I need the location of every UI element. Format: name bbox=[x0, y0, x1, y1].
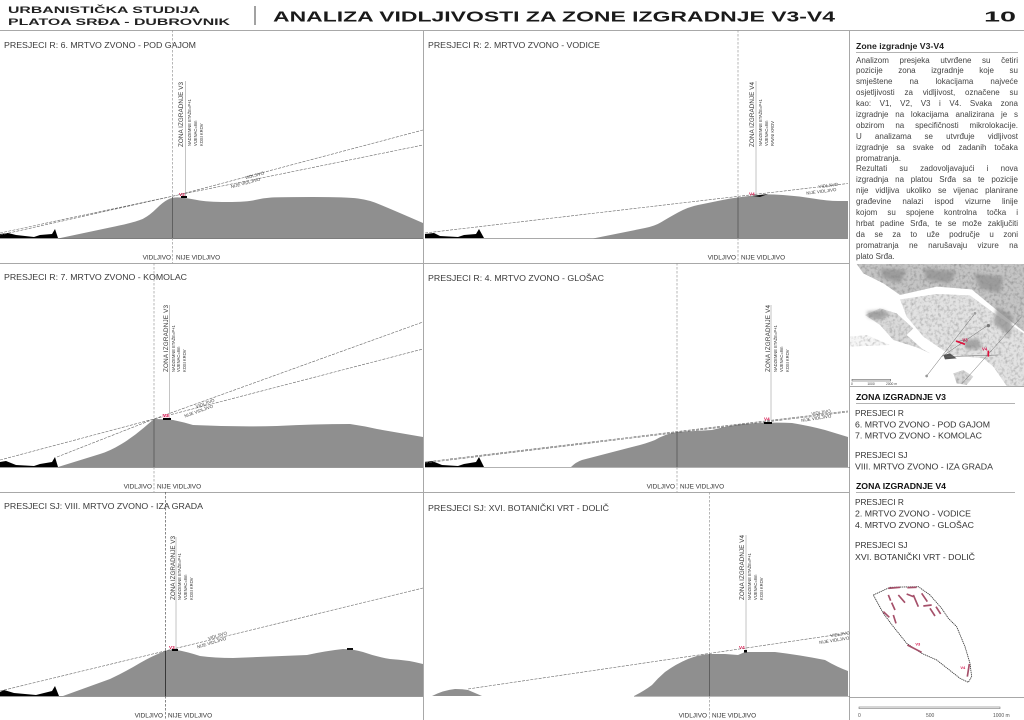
panel: section R2 Vodice: VIDLJIVO bbox=[708, 254, 736, 262]
panel: section R6 Pod Gajom: NADZEMNE ETAŽE=P+1 bbox=[187, 98, 192, 146]
panel: section R6 Pod Gajom: NIJE VIDLJIVO bbox=[230, 176, 261, 189]
panel: section SJ XVI Dolic: PRESJECI SJ: XVI. BOTANIČKI VRT - DOLIČ bbox=[428, 503, 609, 513]
zone V3 list: 6. MRTVO ZVONO - POD GAJOM bbox=[855, 420, 990, 430]
sidebar body text: izgradnja na platou Srđa sa te pozicije bbox=[856, 175, 1018, 184]
panel: section SJ VIII Iza Grada: VIDLJIVO bbox=[207, 630, 228, 641]
panel: section R2 Vodice: V4 bbox=[749, 192, 755, 196]
panel: section R4 Glosac: NADZEMNE ETAŽE=P+1 bbox=[773, 324, 778, 372]
panel: section R2 Vodice: VIJENAC=8m bbox=[764, 120, 769, 146]
panel: section R2 Vodice: ZONA IZGRADNJE V4 bbox=[749, 82, 756, 147]
panel: section R4 Glosac: VIDLJIVO bbox=[647, 484, 675, 490]
panel: section R6 Pod Gajom: VIJENAC=8m bbox=[193, 120, 198, 146]
header: study title: URBANISTIČKA STUDIJA bbox=[8, 4, 200, 16]
panel: section R6 Pod Gajom: VIDLJIVO bbox=[244, 170, 265, 180]
plateau outline map bbox=[873, 587, 972, 682]
location map: 2000 m bbox=[886, 382, 897, 386]
sidebar body text: obzirom na specifičnosti mikrolokacije. bbox=[856, 121, 1018, 130]
plateau outline map: V3 bbox=[915, 642, 921, 647]
panel: section R4 Glosac: NIJE VIDLJIVO bbox=[680, 484, 724, 490]
sidebar body text: Rezultati su zadovoljavajući i nova bbox=[856, 164, 1018, 173]
zone V4 list: XVI. BOTANIČKI VRT - DOLIČ bbox=[855, 552, 975, 562]
location map bbox=[850, 264, 1024, 386]
panel: section R4 Glosac: V4 bbox=[764, 416, 770, 422]
zone V3 list: PRESJECI R bbox=[855, 408, 904, 418]
zone V4 list bbox=[855, 482, 1015, 562]
panel: section R7 Komolac: V3 bbox=[163, 413, 169, 418]
panel: section R7 Komolac: VIDLJIVO bbox=[124, 484, 152, 490]
sidebar body text: nije vidljiva ukoliko se vijenac planirane bbox=[856, 186, 1018, 195]
panel: section R6 Pod Gajom: V3 bbox=[179, 192, 185, 197]
panel: section R4 Glosac: VIDLJIVO bbox=[811, 408, 832, 416]
panel: section R6 Pod Gajom: PRESJECI R: 6. MRTVO ZVONO - POD GAJOM bbox=[4, 41, 196, 50]
sidebar body text: plato Srđa. bbox=[856, 252, 895, 261]
header: study title: PLATOA SRĐA - DUBROVNIK bbox=[8, 17, 230, 28]
panel: section R4 Glosac: KOSI KROV bbox=[785, 349, 790, 372]
panel: section SJ VIII Iza Grada: V3 bbox=[169, 645, 175, 650]
panel: section R2 Vodice: NIJE VIDLJIVO bbox=[806, 187, 837, 196]
sidebar body text: građevine nalazi ispod vizurne linije bbox=[856, 197, 1018, 206]
panel: section SJ VIII Iza Grada: NIJE VIDLJIVO bbox=[168, 712, 212, 720]
sidebar body text: hrbat padine Srđa, te se može zaključiti bbox=[856, 219, 1018, 228]
sidebar body text: promatranja ne narušavaju vizure na bbox=[856, 241, 1018, 250]
sidebar body text: smještene na lokacijama najveće bbox=[856, 77, 1018, 86]
panel: section SJ VIII Iza Grada: VIDLJIVO bbox=[135, 712, 163, 720]
sidebar body text: pozicije zona izgradnje koje su bbox=[856, 66, 1018, 75]
page number: 10 bbox=[984, 8, 1016, 26]
sidebar body text: izgradnje sa svake od zadanih točaka bbox=[856, 143, 1018, 152]
panel: section SJ VIII Iza Grada: ZONA IZGRADNJE V3 bbox=[170, 536, 177, 600]
panel: section SJ VIII Iza Grada: NIJE VIDLJIVO bbox=[196, 636, 227, 650]
location map: 0 bbox=[851, 382, 853, 386]
panel: section SJ XVI Dolic: ZONA IZGRADNJE V4 bbox=[739, 535, 746, 600]
panel: section R6 Pod Gajom: KOSI KROV bbox=[199, 123, 204, 146]
panel: section R7 Komolac: NADZEMNE ETAŽE=P+1 bbox=[171, 324, 176, 372]
zone V3 list: VIII. MRTVO ZVONO - IZA GRADA bbox=[855, 462, 993, 472]
header: main title: ANALIZA VIDLJIVOSTI ZA ZONE IZGRADNJE V3-V4 bbox=[273, 8, 836, 26]
scale bar bbox=[858, 707, 1010, 719]
panel: section SJ VIII Iza Grada bbox=[0, 492, 423, 720]
panel: section R2 Vodice: PRESJECI R: 2. MRTVO ZVONO - VODICE bbox=[428, 41, 601, 50]
location map: V4 bbox=[982, 346, 988, 351]
location map: 1000 bbox=[867, 382, 875, 386]
panel: section SJ XVI Dolic bbox=[428, 492, 851, 720]
panel: section SJ XVI Dolic: NIJE VIDLJIVO bbox=[712, 712, 756, 720]
panel: section R2 Vodice: VIDLJIVO bbox=[818, 182, 839, 189]
sidebar heading: Zone izgradnje V3-V4 bbox=[856, 41, 944, 51]
panel: section R7 Komolac: VIJENAC=8m bbox=[176, 346, 181, 372]
zone V4 list: 4. MRTVO ZVONO - GLOŠAC bbox=[855, 520, 974, 530]
panel: section R7 Komolac: NIJE VIDLJIVO bbox=[157, 484, 201, 490]
panel: section R7 Komolac: PRESJECI R: 7. MRTVO ZVONO - KOMOLAC bbox=[4, 273, 187, 282]
sidebar body text: kao: V1, V2, V3 i V4. Svaka zona bbox=[856, 99, 1018, 108]
panel: section R2 Vodice: NADZEMNE ETAŽE=P+1 bbox=[758, 98, 763, 146]
panel: section SJ XVI Dolic: VIDLJIVO bbox=[679, 712, 707, 720]
zone V3 list: 7. MRTVO ZVONO - KOMOLAC bbox=[855, 430, 982, 440]
zone V3 list: ZONA IZGRADNJE V3 bbox=[856, 393, 946, 402]
panel: section R4 Glosac: NIJE VIDLJIVO bbox=[801, 413, 832, 423]
plateau outline map: V4 bbox=[960, 665, 966, 670]
panel: section R6 Pod Gajom: ZONA IZGRADNJE V3 bbox=[178, 82, 185, 147]
panel: section SJ XVI Dolic: NIJE VIDLJIVO bbox=[819, 635, 850, 645]
panel: section R7 Komolac: ZONA IZGRADNJE V3 bbox=[163, 305, 170, 372]
sidebar body text: kojom su spojene kontrolna točka i bbox=[856, 208, 1018, 217]
sidebar body text bbox=[856, 56, 1018, 261]
panel: section R4 Glosac bbox=[425, 263, 850, 492]
sidebar body text: U analizama se utvrđuje vidljivost bbox=[856, 132, 1018, 141]
panel: section R4 Glosac: PRESJECI R: 4. MRTVO ZVONO - GLOŠAC bbox=[428, 273, 604, 283]
panel: section R2 Vodice: NIJE VIDLJIVO bbox=[741, 254, 785, 262]
zone V4 list: PRESJECI R bbox=[855, 497, 904, 507]
zone V4 list: PRESJECI SJ bbox=[855, 540, 908, 550]
sidebar body text: promatranja. bbox=[856, 154, 901, 163]
header: study title bbox=[8, 4, 230, 28]
zone V4 list: ZONA IZGRADNJE V4 bbox=[856, 482, 946, 491]
panel: section R7 Komolac: KOSI KROV bbox=[182, 349, 187, 372]
panel: section SJ VIII Iza Grada: VIJENAC=8m bbox=[183, 574, 188, 600]
panel: section SJ XVI Dolic: VIDLJIVO bbox=[830, 630, 851, 638]
location map: V3 bbox=[962, 338, 968, 343]
sidebar body text: Analizom presjeka utvrđene su četiri bbox=[856, 56, 1018, 64]
panel: section R7 Komolac: VIDLJIVO bbox=[195, 398, 216, 409]
panel: section R4 Glosac: VIJENAC=8m bbox=[779, 346, 784, 372]
zone V3 list bbox=[855, 393, 1015, 472]
panel: section R2 Vodice: RAVNI KROV bbox=[770, 121, 775, 146]
zone V3 list: PRESJECI SJ bbox=[855, 450, 908, 460]
scale bar: 0 bbox=[858, 713, 861, 719]
scale bar: 500 bbox=[926, 713, 935, 719]
panel: section R6 Pod Gajom: NIJE VIDLJIVO bbox=[176, 254, 220, 262]
panel: section SJ XVI Dolic: VIJENAC=8m bbox=[753, 574, 758, 600]
panel: section SJ XVI Dolic: NADZEMNE ETAŽE=P+1 bbox=[747, 552, 752, 600]
panel: section SJ XVI Dolic: V4 bbox=[739, 645, 745, 650]
sidebar body text: osjetljivosti za vidljivost, označene su bbox=[856, 88, 1018, 97]
zone V4 list: 2. MRTVO ZVONO - VODICE bbox=[855, 508, 971, 518]
panel: section R4 Glosac: ZONA IZGRADNJE V4 bbox=[765, 305, 772, 372]
panel: section R6 Pod Gajom bbox=[0, 30, 423, 263]
panel: section SJ VIII Iza Grada: KOSI KROV bbox=[189, 577, 194, 600]
panel: section SJ VIII Iza Grada: PRESJECI SJ: VIII. MRTVO ZVONO - IZA GRADA bbox=[4, 502, 204, 511]
sidebar body text: izgradnje na lokacijama analizirana je s bbox=[856, 110, 1018, 119]
sidebar body text: da se za to uže područje u zoni bbox=[856, 230, 1018, 239]
panel: section SJ XVI Dolic: KOSI KROV bbox=[759, 577, 764, 600]
panel: section R7 Komolac bbox=[0, 263, 423, 492]
panel: section R2 Vodice bbox=[425, 30, 848, 263]
panel: section R7 Komolac: NIJE VIDLJIVO bbox=[184, 403, 214, 419]
panel: section SJ VIII Iza Grada: NADZEMNE ETAŽE=P+1 bbox=[177, 552, 182, 600]
scale bar: 1000 m bbox=[993, 713, 1010, 719]
panel: section R6 Pod Gajom: VIDLJIVO bbox=[143, 254, 171, 262]
